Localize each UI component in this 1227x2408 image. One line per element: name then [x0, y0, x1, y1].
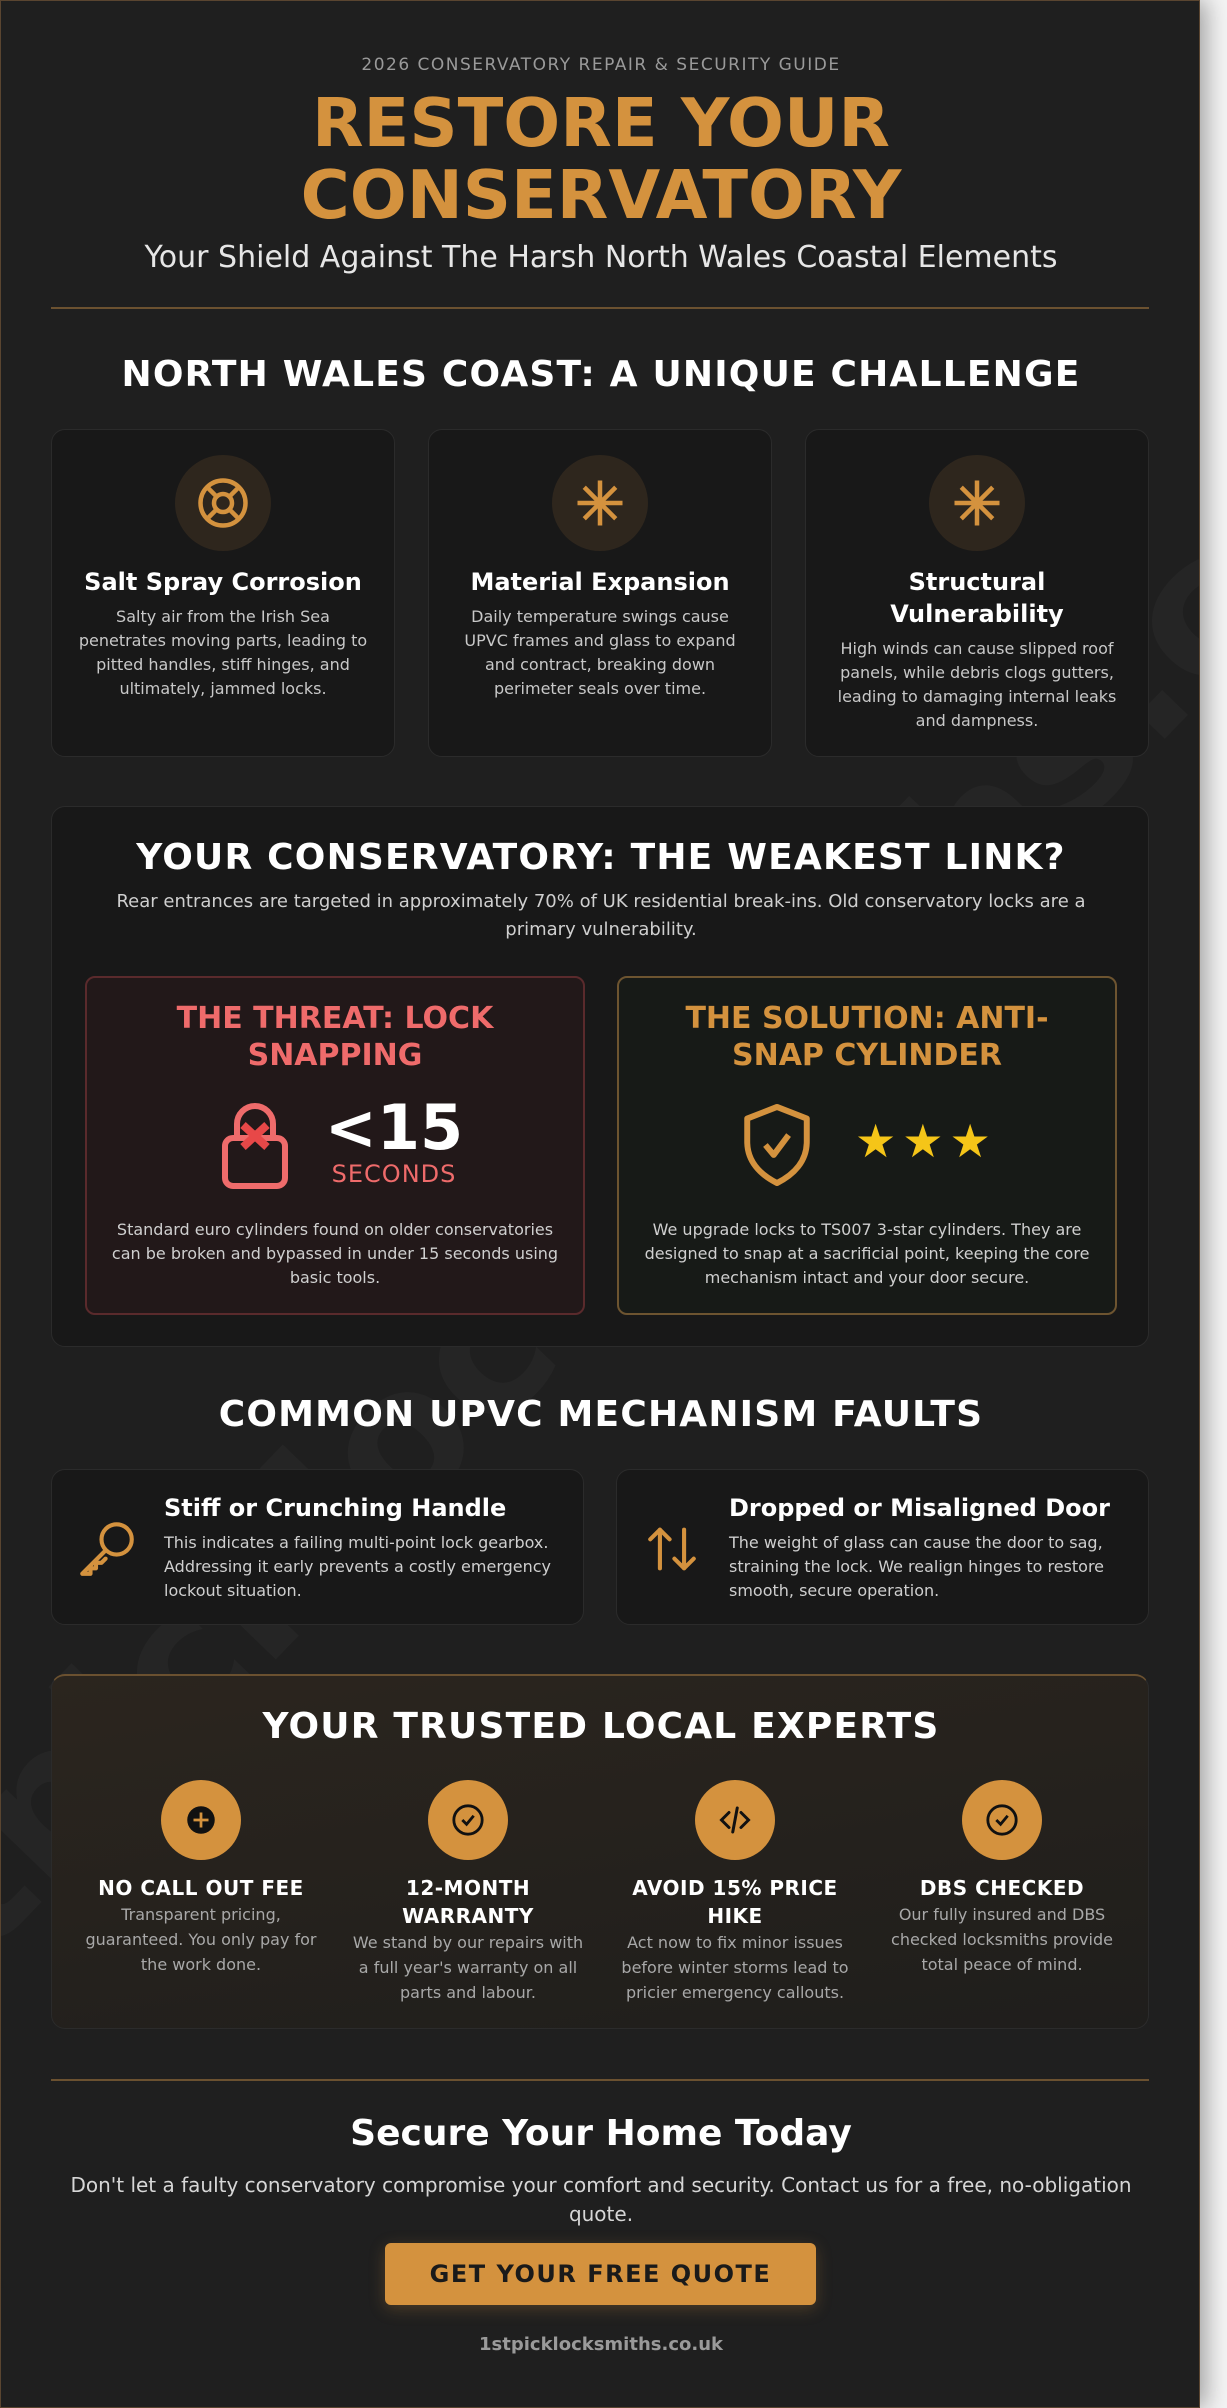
card text: High winds can cause slipped roof panels, while debris clogs gutters, leading to damaging internal leaks and dampness. [838, 639, 1116, 730]
icon [962, 1780, 1042, 1860]
panel: salt spray [51, 429, 395, 757]
CTA heading: Secure Your Home Today [350, 2113, 852, 2154]
feature: no call out fee: Transparent pricing, guaranteed. You only pay for the work done. [85, 1905, 317, 1974]
panel: structural [805, 429, 1149, 757]
CTA text: Don't let a faulty conservatory compromise your comfort and security. Contact us for a free, no-obligation quote. [70, 2173, 1132, 2226]
feature: dbs checked: DBS CHECKED [920, 1876, 1084, 1900]
feature: avoid price hike: HIKE [707, 1904, 763, 1928]
icon [695, 1780, 775, 1860]
card title [890, 568, 1064, 628]
eyebrow label: 2026 CONSERVATORY REPAIR & SECURITY GUIDE [361, 55, 841, 75]
sub-panel: threat [85, 976, 585, 1315]
button [385, 2243, 816, 2305]
feature: warranty: 12-MONTH [406, 1876, 530, 1900]
icon: sparkle [552, 455, 648, 551]
panel: stiff handle [51, 1469, 584, 1625]
threat title [176, 1001, 494, 1073]
threat title: SNAPPING [248, 1038, 422, 1073]
intro text: Rear entrances are targeted in approximately 70% of UK residential break-ins. Old conservatory locks are a primary vulnerability. [116, 891, 1086, 940]
fault text: This indicates a failing multi-point lock gearbox. Addressing it early prevents a costly emergency lockout situation. [164, 1533, 551, 1600]
fault title: Stiff or Crunching Handle [164, 1494, 506, 1522]
card text: Daily temperature swings cause UPVC frames and glass to expand and contract, breaking down perimeter seals over time. [464, 607, 736, 698]
card title: Vulnerability [890, 600, 1064, 628]
icon: shield check [744, 1104, 810, 1186]
card text: Salty air from the Irish Sea penetrates moving parts, leading to pitted handles, stiff hinges, and ultimately, jammed locks. [79, 607, 367, 698]
heading: north wales coast: NORTH WALES COAST: A UNIQUE CHALLENGE [121, 354, 1081, 395]
stat: under 15 seconds: SECONDS [332, 1160, 456, 1188]
solution text: We upgrade locks to TS007 3-star cylinders. They are designed to snap at a sacrificial point, keeping the core mechanism intact and your door secure. [645, 1220, 1089, 1287]
feature: dbs checked [891, 1780, 1113, 1974]
card title: Structural [909, 568, 1045, 596]
panel: trusted experts [51, 1674, 1149, 2029]
card title: Salt Spray Corrosion [84, 568, 362, 596]
threat text: Standard euro cylinders found on older conservatories can be broken and bypassed in under 15 seconds using basic tools. [112, 1220, 558, 1287]
heading: faults: COMMON UPVC MECHANISM FAULTS [219, 1394, 983, 1435]
title: CONSERVATORY [301, 156, 901, 234]
panel: material expansion [428, 429, 772, 757]
title: RESTORE YOUR [312, 84, 890, 162]
feature: no call out fee: NO CALL OUT FEE [98, 1876, 304, 1900]
icon: up-down arrows [648, 1528, 696, 1570]
feature: avoid price hike: Act now to fix minor issues before winter storms lead to pricier emergency callouts. [621, 1933, 849, 2002]
card title: Material Expansion [470, 568, 730, 596]
heading: YOUR CONSERVATORY: THE WEAKEST LINK? [136, 837, 1066, 878]
icon: three stars: ★★★ [855, 1114, 997, 1168]
heading: YOUR TRUSTED LOCAL EXPERTS [262, 1706, 940, 1747]
feature: avoid price hike [621, 1780, 849, 2002]
icon [428, 1780, 508, 1860]
icon: broken padlock [222, 1103, 288, 1189]
panel: weakest link [51, 806, 1149, 1347]
solution title: SNAP CYLINDER [732, 1038, 1002, 1073]
solution title: THE SOLUTION: ANTI- [685, 1001, 1049, 1036]
feature: warranty: We stand by our repairs with a full year's warranty on all parts and labour. [353, 1933, 583, 2002]
tagline: Your Shield Against The Harsh North Wales Coastal Elements [144, 240, 1058, 275]
feature: warranty: WARRANTY [402, 1904, 534, 1928]
feature: avoid price hike: AVOID 15% PRICE [632, 1876, 838, 1900]
sub-panel: solution [617, 976, 1117, 1315]
website url: 1stpicklocksmiths.co.uk [479, 2334, 723, 2355]
icon [161, 1780, 241, 1860]
title [301, 84, 902, 234]
feature: dbs checked: Our fully insured and DBS checked locksmiths provide total peace of mind. [891, 1905, 1113, 1974]
panel: dropped door [616, 1469, 1149, 1625]
stat: under 15 seconds: <15 [325, 1091, 463, 1164]
icon: sparkle [929, 455, 1025, 551]
icon: lifebuoy [175, 455, 271, 551]
fault text: The weight of glass can cause the door to sag, straining the lock. We realign hinges to restore smooth, secure operation. [729, 1533, 1104, 1600]
feature: no call out fee [85, 1780, 317, 1974]
fault title: Dropped or Misaligned Door [729, 1494, 1110, 1522]
solution title [685, 1001, 1049, 1073]
icon: key [80, 1522, 134, 1576]
feature: warranty [353, 1780, 583, 2002]
button: GET YOUR FREE QUOTE [430, 2260, 771, 2288]
threat title: THE THREAT: LOCK [177, 1001, 493, 1036]
